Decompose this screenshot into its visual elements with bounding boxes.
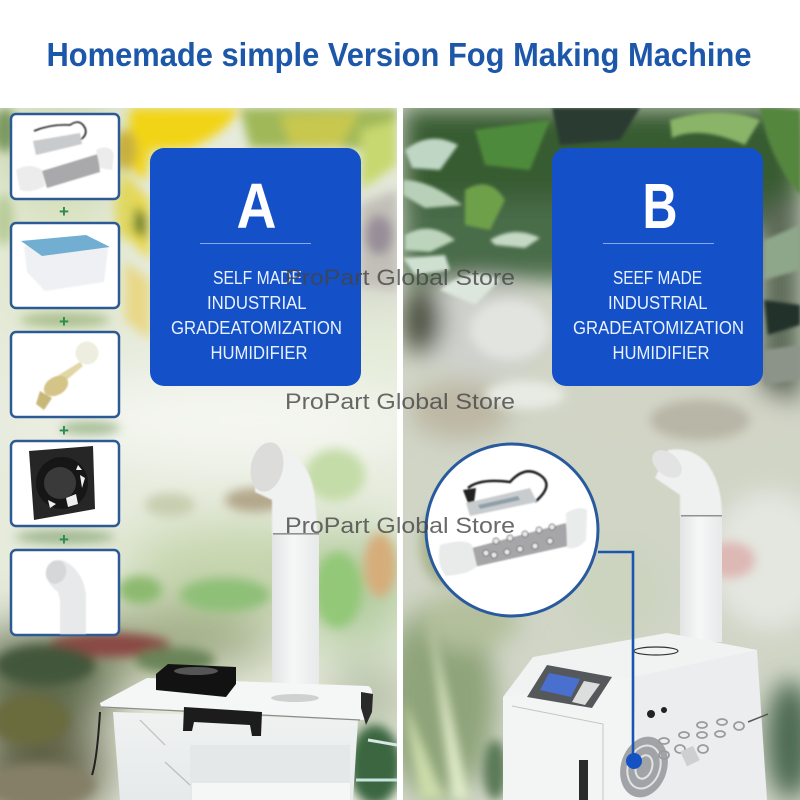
plus sign: + [59, 530, 69, 549]
right garden photo background [385, 108, 800, 800]
yellow flower [128, 108, 240, 180]
left garden photo background [0, 100, 430, 800]
component list: left column [11, 114, 119, 635]
steel bar [472, 523, 568, 567]
right photo: industrial humidifier [503, 633, 768, 800]
panel description: GRADEATOMIZATION [573, 318, 744, 338]
water hose [368, 740, 397, 745]
panel letter: A [236, 170, 276, 242]
monstera leaves [405, 139, 458, 170]
right float [566, 508, 587, 548]
lid clip [183, 707, 262, 736]
left photo: clear water container [92, 664, 397, 800]
cabinet side [633, 650, 767, 800]
panel description: HUMIDIFIER [210, 343, 308, 363]
container body [113, 712, 358, 800]
component card: plastic storage box [11, 223, 119, 308]
control panel [527, 665, 612, 708]
watermark 1: ProPart Global Store [285, 265, 515, 290]
panel description: HUMIDIFIER [612, 343, 710, 363]
left float [439, 542, 477, 576]
panel description: SEEF MADE [613, 268, 702, 288]
panel key strip [572, 681, 600, 705]
plus sign: + [59, 421, 69, 440]
right photo: pipe elbow [647, 445, 722, 642]
plus sign: + [59, 312, 69, 331]
panel description: INDUSTRIAL [608, 293, 708, 313]
pipe socket [271, 694, 319, 702]
component card: atomizer and power supply [11, 114, 119, 199]
plug [463, 488, 476, 503]
callout circle: atomizer and power supply [426, 444, 598, 616]
cabinet front [503, 677, 640, 800]
watermark 2: ProPart Global Store [285, 389, 515, 414]
component card: pipe elbow [11, 550, 119, 635]
component card: cooling fan [11, 441, 119, 526]
knobs [647, 710, 655, 718]
vent ring on top [634, 647, 678, 655]
blue connector line and dot [598, 552, 642, 769]
small black fan [156, 664, 236, 697]
panel letter: B [642, 170, 678, 242]
panel description: SELF MADE [213, 268, 302, 288]
left photo: pipe elbow [246, 439, 319, 699]
plus sign: + [59, 202, 69, 221]
power supply box [466, 488, 537, 516]
watermark 3: ProPart Global Store [285, 513, 515, 538]
panel description: GRADEATOMIZATION [171, 318, 342, 338]
panel description: INDUSTRIAL [207, 293, 307, 313]
cabinet top [503, 633, 757, 800]
container lid [100, 678, 372, 720]
panel: B [552, 148, 763, 386]
component card: float valve [11, 332, 119, 417]
power cord [468, 471, 546, 502]
LCD screen [540, 673, 580, 697]
mid garden leaves [314, 552, 362, 628]
low red and dark foliage [50, 633, 170, 657]
fan guard [613, 730, 675, 800]
drain slot [579, 760, 588, 800]
panel: A [150, 148, 361, 386]
title: Homemade simple Version Fog Making Machine [46, 36, 752, 73]
atomizer rings [659, 719, 744, 759]
left edge foliage [0, 108, 17, 152]
